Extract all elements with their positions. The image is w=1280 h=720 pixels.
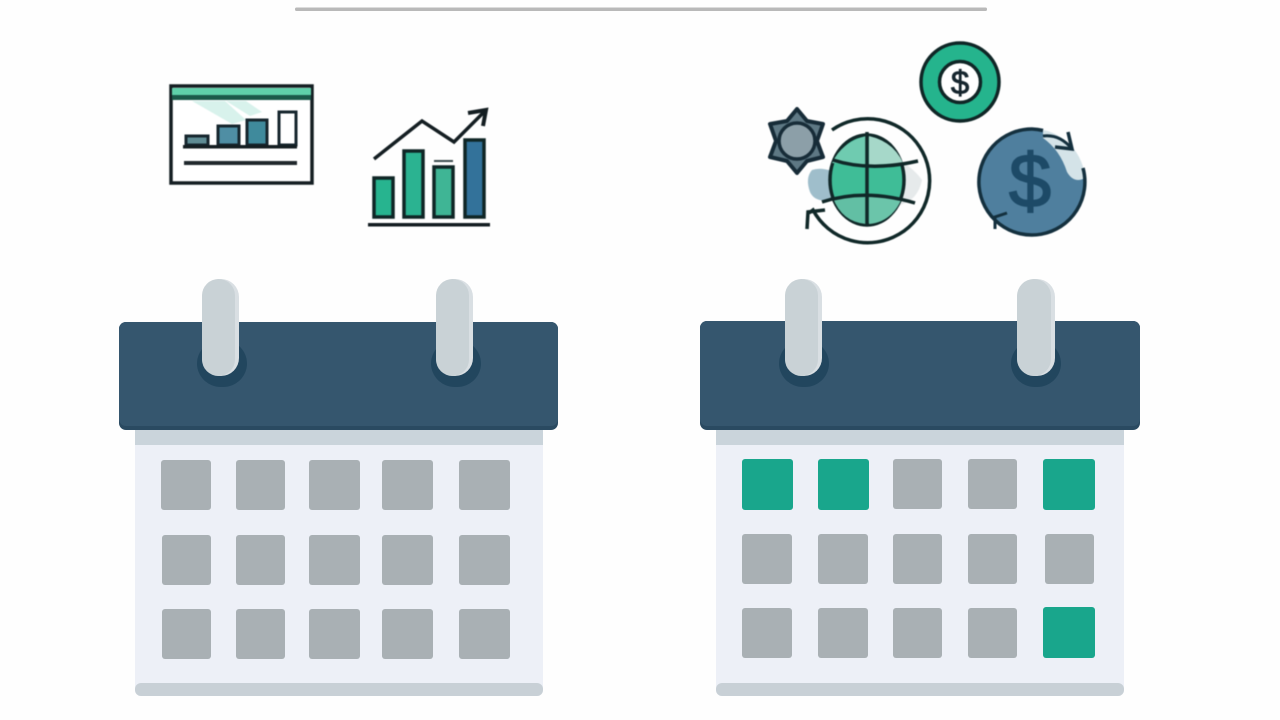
- calendar body: [716, 428, 1124, 696]
- day grid: [742, 459, 1094, 658]
- calendar header: [119, 322, 558, 430]
- calendar body: [135, 428, 543, 696]
- top divider line: [295, 8, 987, 11]
- icon: report with bar chart: [171, 86, 312, 183]
- highlighted days: [742, 459, 1095, 658]
- calendar: left, no highlighted days: [119, 279, 558, 696]
- icon: green dollar coin: [921, 43, 999, 121]
- icon: star gear: [770, 109, 823, 173]
- icon: blue dollar coin with arrow: $: [1009, 139, 1051, 224]
- icon: rising bar chart with arrow: [368, 110, 490, 226]
- binding rings: [197, 279, 481, 387]
- icon: green dollar coin: $: [951, 64, 969, 101]
- icon: globe with circular arrows: [807, 119, 930, 243]
- day grid: [161, 460, 510, 659]
- binding rings: [779, 279, 1061, 387]
- calendar: right, with highlighted days: [700, 279, 1140, 696]
- calendar header: [700, 321, 1140, 430]
- icon: blue dollar coin with arrow: [979, 129, 1085, 235]
